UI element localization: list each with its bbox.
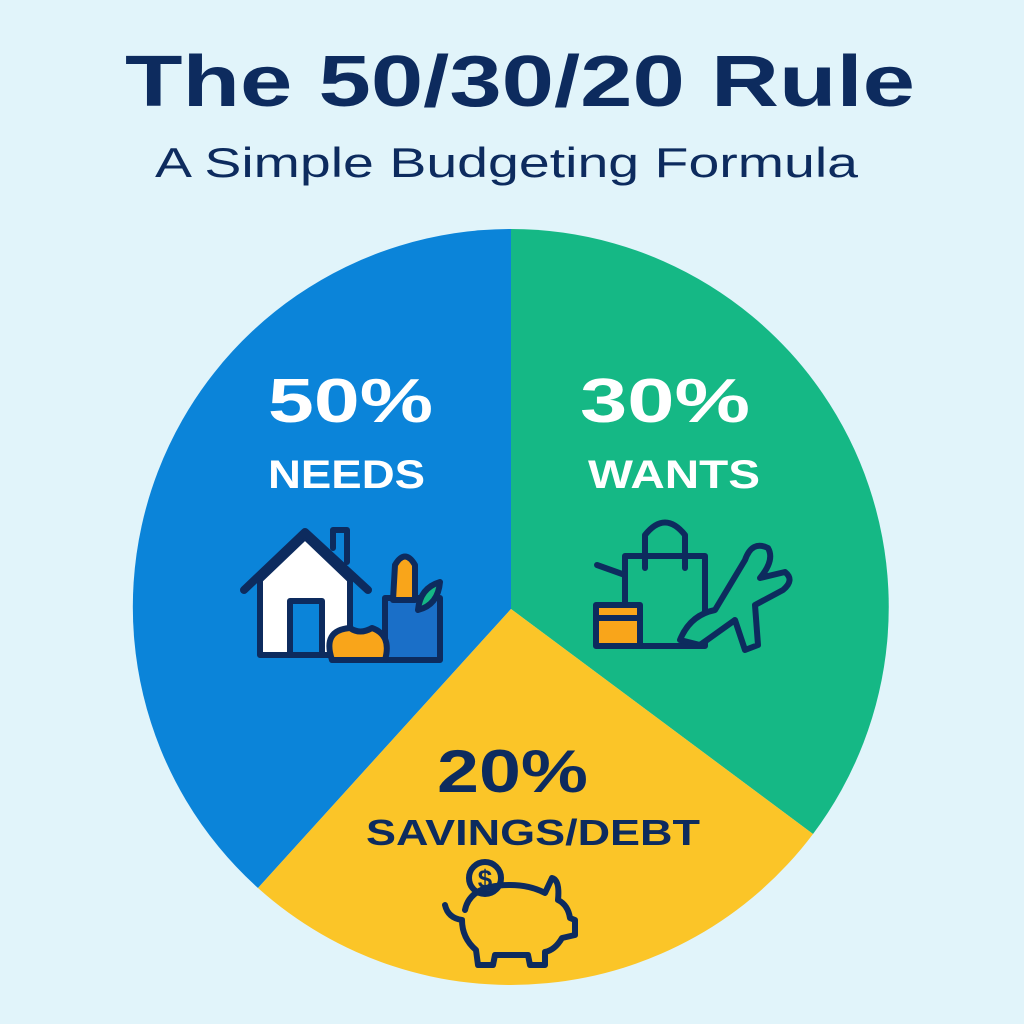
subtitle: A Simple Budgeting Formula: [155, 139, 859, 186]
label: 30% wants: WANTS: [588, 453, 760, 497]
label: 50% needs: NEEDS: [268, 453, 425, 497]
label: 50% needs: 50%: [268, 367, 433, 436]
pie chart: [133, 229, 889, 985]
label: 50% needs: [268, 367, 433, 497]
label: 30% wants: 30%: [580, 367, 750, 436]
title: The 50/30/20 Rule: [125, 42, 915, 122]
label: 20% savings: 20%: [437, 738, 588, 805]
icon: piggy bank: [445, 862, 575, 965]
slice: wants: [511, 229, 889, 834]
icon: shopping bag, cup, plane: [596, 522, 790, 650]
slice: savings: [258, 609, 813, 985]
icon: piggy bank: $: [478, 864, 493, 894]
label: 30% wants: [580, 367, 760, 497]
label: 20% savings: [366, 738, 700, 853]
icon: house and groceries: [244, 530, 440, 660]
slice: needs: [133, 229, 511, 888]
label: 20% savings: SAVINGS/DEBT: [366, 812, 700, 853]
